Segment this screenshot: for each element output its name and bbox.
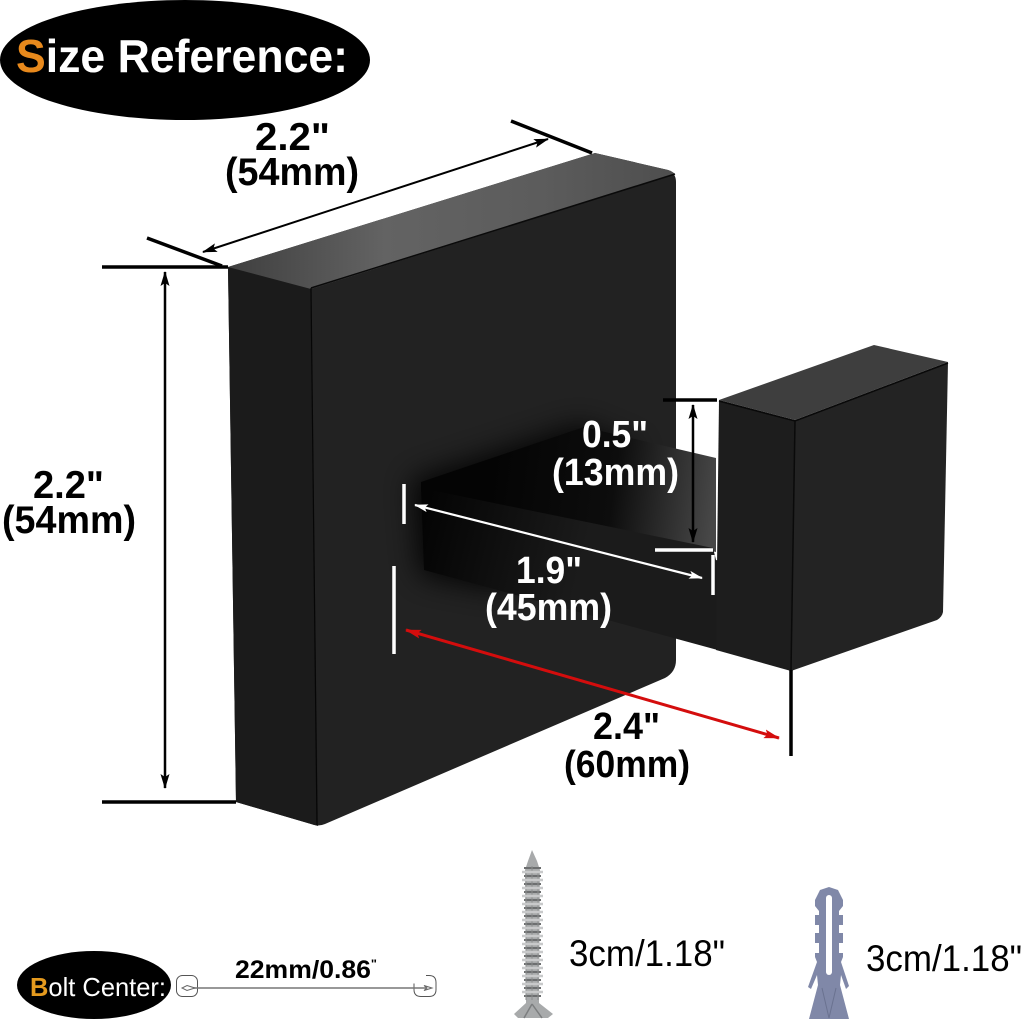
dimension: head height 0.5 in bbox=[552, 400, 717, 550]
bolt center dimension diagram bbox=[176, 956, 436, 996]
dimension: plate width 2.2 in: (54mm) bbox=[225, 151, 359, 194]
bolt center dimension diagram: " bbox=[371, 957, 377, 971]
icon: wall anchor bbox=[808, 887, 849, 1019]
dimension: arm length 1.9 in bbox=[404, 484, 713, 629]
hook head bbox=[716, 345, 948, 671]
dimension: plate height 2.2 in: (54mm) bbox=[2, 499, 136, 542]
dimension: arm length 1.9 in: (45mm) bbox=[485, 587, 612, 629]
dimension: total depth 2.4 in: (60mm) bbox=[564, 744, 690, 786]
title badge: Size Reference bbox=[0, 0, 370, 120]
dimension: plate width 2.2 in bbox=[147, 116, 592, 266]
dimension: plate height 2.2 in: 2.2" bbox=[33, 464, 104, 507]
icon: screw bbox=[514, 850, 553, 1018]
dimension: head height 0.5 in: (13mm) bbox=[552, 452, 679, 494]
dimension: total depth 2.4 in bbox=[394, 566, 791, 786]
dimension: arm length 1.9 in: 1.9" bbox=[516, 550, 582, 592]
bolt center badge bbox=[17, 951, 171, 1019]
hook arm bbox=[421, 427, 795, 670]
dimension: head height 0.5 in: 0.5" bbox=[582, 414, 648, 456]
title badge: Size Reference: Size Reference: bbox=[16, 30, 348, 82]
bolt center badge: Bolt Center: bbox=[30, 972, 166, 1002]
mounting plate bbox=[228, 153, 676, 826]
bolt center dimension diagram: 22mm/0.86 bbox=[235, 956, 363, 984]
hook product illustration bbox=[228, 153, 948, 826]
dimension: plate width 2.2 in: 2.2" bbox=[255, 116, 330, 159]
screw length label: 3cm/1.18" bbox=[569, 933, 725, 974]
dimension: total depth 2.4 in: 2.4" bbox=[593, 706, 660, 748]
dimension: plate height 2.2 in bbox=[2, 267, 236, 802]
